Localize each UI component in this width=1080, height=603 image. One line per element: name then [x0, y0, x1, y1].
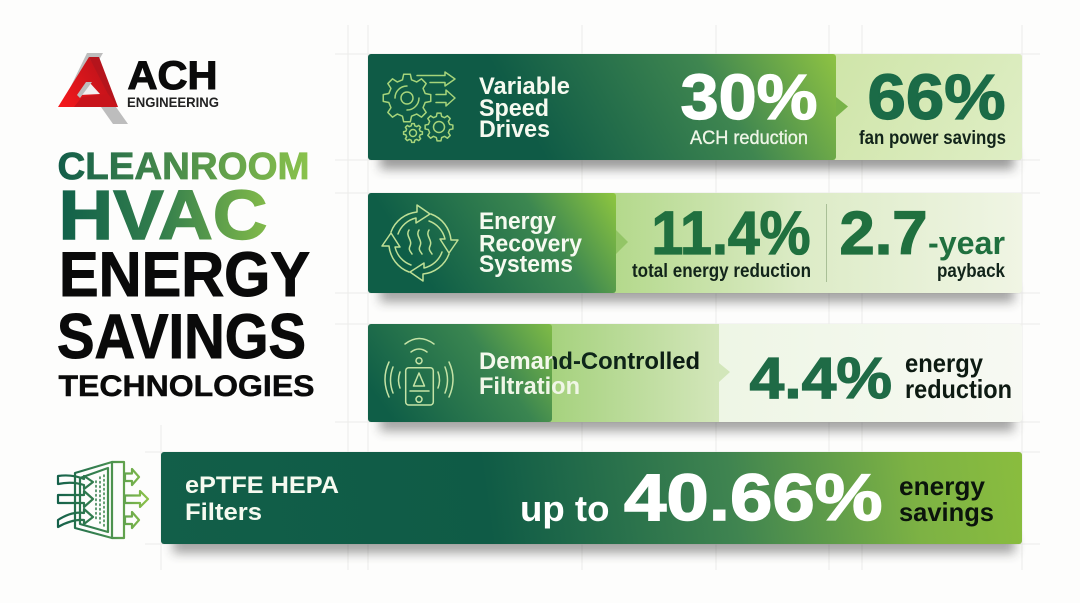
label: variable speed drives: Speed: [479, 95, 549, 122]
logo mark: [58, 53, 128, 124]
stat: up to 40.66% energy savings: savings: [899, 497, 994, 527]
stat: 4.4% energy reduction: energy: [905, 348, 983, 378]
stat: 11.4% total energy reduction: [632, 199, 811, 282]
title line: cleanroom: CLEANROOM: [58, 146, 310, 188]
label: energy recovery systems: Systems: [479, 251, 573, 278]
stat: 66% fan power savings: 66%: [868, 61, 1006, 133]
icon: gears and arrows: [383, 72, 455, 142]
stat: 30% ACH reduction: ACH reduction: [690, 128, 808, 149]
stat: 11.4% total energy reduction: total energy reduction: [632, 261, 811, 282]
title line: energy: ENERGY: [59, 240, 310, 310]
label: variable speed drives: Drives: [479, 116, 550, 143]
stat: 2.7-year payback: payback: [937, 261, 1005, 282]
label: ePTFE HEPA filters: ePTFE HEPA: [185, 472, 339, 499]
label: demand-controlled filtration: [479, 348, 700, 400]
title line: technologies: TECHNOLOGIES: [58, 370, 314, 403]
stat: 2.7-year payback: -year: [928, 225, 1005, 261]
label: energy recovery systems: Energy: [479, 208, 557, 235]
label: demand-controlled filtration: Filtration: [479, 373, 580, 400]
label: ePTFE HEPA filters: [185, 472, 339, 526]
stat: 2.7-year payback: 2.7: [840, 199, 928, 267]
stat: up to 40.66% energy savings: energy: [899, 471, 986, 501]
stat: up to 40.66% energy savings: 40.66%: [624, 460, 882, 534]
panel: demand-controlled filtration: [368, 324, 1022, 431]
stat: 66% fan power savings: fan power savings: [859, 128, 1006, 149]
panel: energy recovery systems: [368, 193, 1022, 302]
label: variable speed drives: Variable: [479, 73, 570, 100]
stat: 30% ACH reduction: 30%: [680, 61, 818, 133]
logo wordmark: ACH: [128, 54, 218, 98]
stat: 4.4% energy reduction: reduction: [905, 374, 1012, 404]
label: energy recovery systems: Recovery: [479, 230, 583, 258]
stat: up to 40.66% energy savings: up to: [520, 488, 610, 529]
stat: 4.4% energy reduction: [750, 346, 1012, 411]
logo subtitle: ENGINEERING: [127, 94, 219, 110]
panel: variable speed drives: [368, 54, 1022, 169]
stat: 4.4% energy reduction: 4.4%: [750, 346, 892, 411]
title line: HVAC: HVAC: [58, 176, 268, 254]
title: [57, 146, 314, 403]
label: ePTFE HEPA filters: Filters: [185, 499, 262, 526]
title line: savings: SAVINGS: [57, 302, 306, 372]
panel: ePTFE HEPA filters: [58, 452, 1022, 553]
icon: recovery arrows: [382, 205, 458, 281]
background grid: [145, 25, 1040, 570]
icon: HEPA filter with airflow: [58, 462, 148, 538]
icon: wireless controller: [385, 338, 453, 405]
label: energy recovery systems: [479, 208, 583, 278]
label: demand-controlled filtration: Demand-Controlled: [479, 348, 700, 375]
label: variable speed drives: [479, 73, 570, 143]
stat: up to 40.66% energy savings: [520, 460, 994, 534]
stat: 11.4% total energy reduction: 11.4%: [652, 199, 810, 267]
logo: ACH Engineering: [58, 53, 219, 124]
stat: 2.7-year payback: [840, 199, 1005, 282]
